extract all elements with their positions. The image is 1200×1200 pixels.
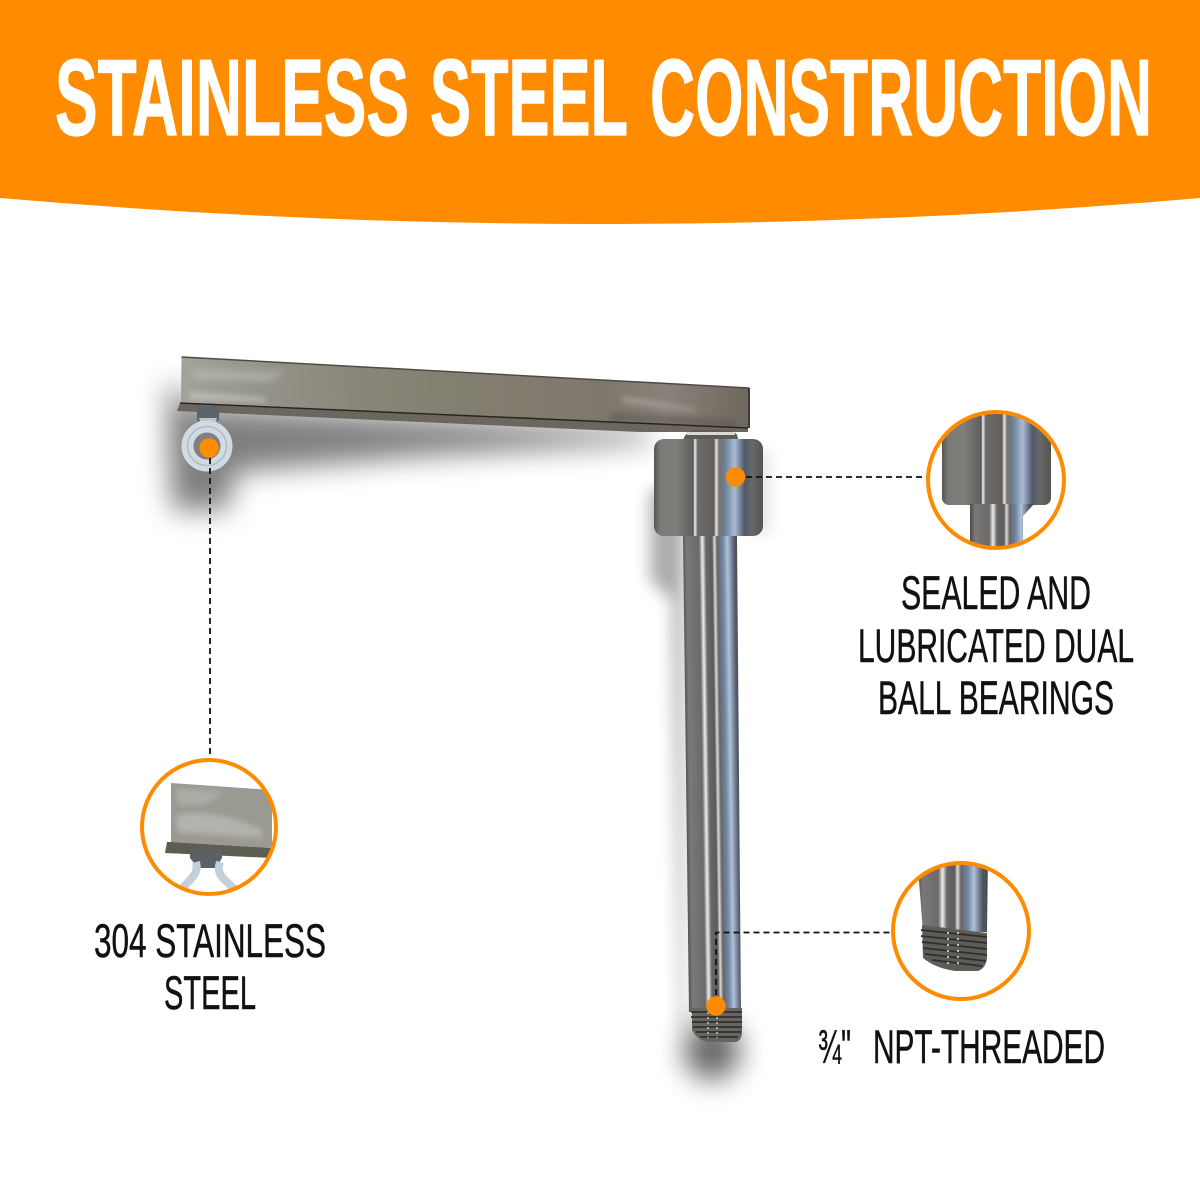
leader line: bearing detail [736, 476, 927, 478]
header banner [0, 0, 1200, 224]
pipe end shadow [684, 1020, 740, 1080]
detail circle: stainless steel [141, 759, 277, 898]
eye bolt [188, 406, 226, 466]
bearing side shadow [755, 450, 767, 535]
threads [691, 1008, 742, 1042]
bearing top collar [683, 430, 738, 440]
label: bearings: SEALED AND [901, 566, 1091, 619]
label: 304 stainless steel [94, 914, 326, 1019]
leader line: thread detail [716, 932, 892, 1005]
label: NPT threaded [818, 1020, 1105, 1073]
title [55, 37, 1152, 159]
label: 304 stainless steel: 304 STAINLESS [94, 914, 326, 967]
bearing housing [654, 439, 763, 536]
bearing collar highlight [687, 432, 735, 435]
pipe shadow [650, 490, 684, 1030]
arm shadow [168, 385, 650, 510]
leader line: eye bolt to steel detail [209, 448, 211, 760]
arm lower lip [177, 403, 748, 432]
detail circle: bearings [928, 400, 1064, 560]
product photo: swivel arm [168, 357, 767, 1080]
detail circle: threads [893, 855, 1029, 999]
label: 304 stainless steel: STEEL [164, 966, 256, 1019]
label: bearings [858, 566, 1134, 724]
pipe [683, 536, 741, 1012]
title: STAINLESS [55, 37, 409, 159]
label: NPT threaded: ¾" [818, 1020, 851, 1073]
marker dots [199, 438, 745, 1016]
title: STEEL [430, 37, 628, 159]
arm top face [181, 357, 749, 428]
